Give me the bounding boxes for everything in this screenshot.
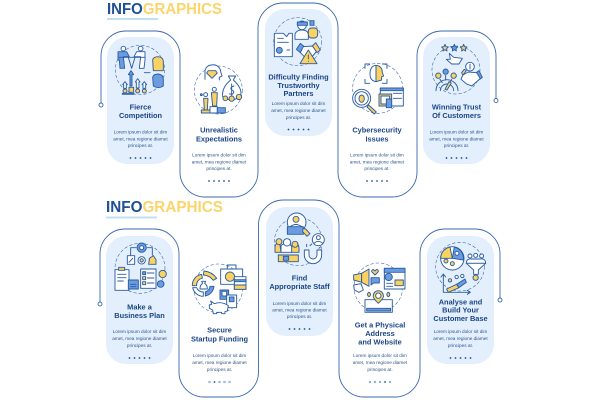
text block: description: Lorem ipsum dolor sit dim — [350, 152, 404, 158]
title: get a physical address and website: Address — [365, 329, 395, 338]
title: fierce competition: Competition — [119, 111, 163, 120]
pagination dots — [289, 328, 310, 330]
pagination dots — [209, 381, 230, 383]
title: get a physical address and website: Get a Physical — [355, 320, 405, 330]
pagination dots — [366, 180, 388, 182]
text block: description: principes at. — [207, 367, 232, 372]
title: make a business plan: Make a — [127, 302, 153, 312]
title: difficulty finding trustworthy partners: Difficulty Finding — [268, 72, 329, 82]
icon: cybersecurity — [353, 63, 403, 114]
text block: description: Lorem ipsum dolor sit dim — [434, 329, 487, 334]
panel: secure startup funding — [191, 264, 249, 383]
text block: description: Lorem ipsum dolor sit dim — [272, 101, 325, 106]
pagination dots — [208, 180, 230, 182]
text block: description: principes at. — [206, 166, 232, 171]
pagination dots — [130, 157, 151, 159]
pagination dots — [369, 381, 391, 383]
panel: make a business plan — [106, 236, 173, 364]
title: winning trust of customers: Of Customers — [432, 111, 481, 120]
icon: address and website — [354, 263, 405, 312]
title: make a business plan: Business Plan — [114, 311, 165, 320]
icon: competition — [115, 45, 165, 95]
title: analyse and build your customer base: Customer Base — [433, 314, 488, 323]
text block: description: principes at. — [287, 314, 312, 319]
pagination dots — [288, 129, 309, 130]
title: cybersecurity issues: Cybersecurity — [352, 126, 403, 134]
text block: description: Lorem ipsum dolor sit dim — [113, 329, 166, 334]
heading: top infographics: INFOGRAPHICS — [107, 1, 222, 18]
text block: description: amet, mea regione diamet — [433, 336, 488, 341]
panel: fierce competition — [107, 37, 174, 164]
title: analyse and build your customer base: Analyse and — [439, 298, 483, 306]
icon: customer base analysis — [436, 242, 486, 294]
title: get a physical address and website: and Website — [358, 338, 402, 346]
text block: description: Lorem ipsum dolor sit dim — [192, 152, 246, 158]
icon: business plan — [115, 243, 166, 293]
title: fierce competition: Fierce — [130, 102, 151, 112]
panel: winning trust of customers — [423, 37, 490, 164]
text block: description: Lorem ipsum dolor sit dim — [193, 353, 246, 358]
text block: description: Lorem ipsum dolor sit dim — [114, 130, 167, 134]
timeline outline: bottom — [98, 200, 502, 397]
panel: difficulty finding partners — [265, 9, 332, 136]
panel: find appropriate staff — [266, 207, 333, 336]
text block: description: amet, mea regione diamet — [350, 160, 405, 164]
icon: expectations — [194, 65, 242, 114]
text block: description: principes at. — [444, 143, 469, 148]
panel: analyse and build customer base — [427, 236, 494, 364]
text block: description: principes at. — [127, 343, 152, 348]
pagination dots — [129, 357, 150, 359]
title: unrealistic expectations: Expectations — [196, 134, 242, 144]
pagination dots — [450, 357, 471, 359]
text block: description: Lorem ipsum dolor sit dim — [430, 130, 483, 134]
title: winning trust of customers: Winning Trust — [432, 102, 482, 112]
icon: find staff — [274, 213, 324, 266]
text block: description: amet, mea regione diamet — [271, 108, 326, 113]
icon: trustworthy partners — [274, 18, 322, 66]
pagination dots — [446, 157, 467, 159]
title: analyse and build your customer base: Build Your — [442, 306, 479, 314]
text block: description: Lorem ipsum dolor sit dim — [353, 353, 407, 358]
panel: cybersecurity issues — [350, 63, 405, 182]
title: cybersecurity issues: Issues — [365, 134, 389, 144]
title: difficulty finding trustworthy partners: Trustworthy — [277, 81, 321, 90]
text block: description: Lorem ipsum dolor sit dim — [273, 301, 326, 306]
title: difficulty finding trustworthy partners: Partners — [284, 89, 314, 98]
title: find appropriate staff: Find — [292, 274, 308, 282]
text block: description: amet, mea regione diamet — [353, 360, 408, 365]
text block: description: amet, mea regione diamet — [113, 136, 168, 141]
icon: startup funding — [192, 264, 246, 314]
panel: physical address and website — [353, 263, 408, 383]
text block: description: principes at. — [364, 166, 390, 171]
panel: unrealistic expectations — [192, 65, 247, 182]
text block: description: amet, mea regione diamet — [429, 136, 484, 141]
text block: description: amet, mea regione diamet — [192, 360, 247, 365]
text block: description: principes at. — [128, 143, 153, 148]
text block: description: principes at. — [448, 343, 473, 348]
title: unrealistic expectations: Unrealistic — [200, 126, 238, 134]
text block: description: principes at. — [286, 115, 311, 120]
title: secure startup funding: Startup Funding — [191, 334, 249, 344]
title: secure startup funding: Secure — [207, 326, 232, 334]
text block: description: amet, mea regione diamet — [272, 308, 327, 312]
timeline outline: top — [99, 3, 498, 197]
text block: description: amet, mea regione diamet — [192, 160, 247, 164]
icon: customer trust — [432, 44, 482, 94]
text block: description: amet, mea regione diamet — [112, 336, 167, 341]
text block: description: principes at. — [367, 367, 393, 372]
heading: bottom infographics: INFOGRAPHICS — [106, 199, 223, 216]
title: find appropriate staff: Appropriate Staff — [269, 282, 330, 291]
